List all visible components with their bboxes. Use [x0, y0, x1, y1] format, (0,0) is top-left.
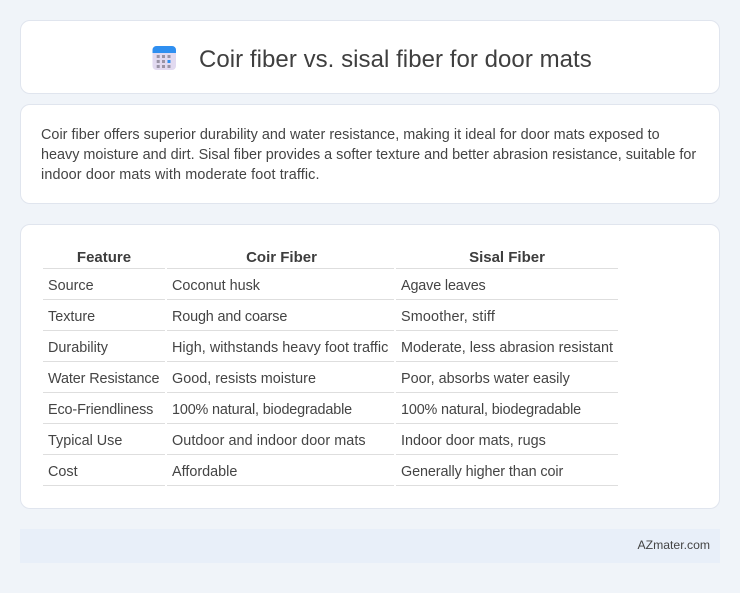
row: water resistance	[48, 371, 570, 387]
table header: Coir Fiber	[246, 249, 317, 266]
row: typical use: Outdoor and indoor door mats	[172, 433, 366, 449]
row: durability: Moderate, less abrasion resistant	[401, 340, 613, 356]
summary paragraph: Coir fiber offers superior durability and water resistance, making it ideal for door mats exposed to	[41, 127, 660, 143]
row: typical use	[48, 433, 546, 449]
panel: summary text	[20, 104, 720, 204]
table header: Feature	[77, 249, 131, 266]
row: eco-friendliness: 100% natural, biodegradable	[172, 402, 352, 418]
row: durability: Durability	[48, 340, 108, 356]
row: water resistance: Good, resists moisture	[172, 371, 316, 387]
summary paragraph: heavy moisture and dirt. Sisal fiber provides a softer texture and better abrasion resistance, suitable for	[41, 147, 696, 163]
row: typical use: Indoor door mats, rugs	[401, 433, 546, 449]
row: source	[48, 278, 486, 294]
row: source: Coconut husk	[172, 278, 260, 294]
summary paragraph: indoor door mats with moderate foot traffic.	[41, 167, 320, 183]
row: texture	[48, 309, 495, 325]
row: eco-friendliness	[48, 402, 581, 418]
footer bar	[20, 529, 720, 563]
panel: title card	[20, 20, 720, 94]
table rules	[43, 268, 618, 486]
row: source: Source	[48, 278, 94, 294]
table header	[77, 249, 545, 266]
row: texture: Texture	[48, 309, 95, 325]
row: durability: High, withstands heavy foot traffic	[172, 340, 388, 356]
row: cost: Generally higher than coir	[401, 464, 563, 480]
row: eco-friendliness: 100% natural, biodegradable	[401, 402, 581, 418]
summary paragraph	[41, 127, 696, 183]
row: water resistance: Water Resistance	[48, 371, 159, 387]
panel: comparison table	[20, 224, 720, 509]
icon: calendar	[152, 46, 176, 70]
row: texture: Smoother, stiff	[401, 309, 495, 325]
footer source text: AZmater.com	[638, 538, 710, 552]
row: cost: Cost	[48, 464, 78, 480]
row: cost	[48, 464, 564, 480]
row: cost: Affordable	[172, 464, 237, 480]
table header: Sisal Fiber	[469, 249, 545, 266]
row: source: Agave leaves	[401, 278, 486, 294]
row: water resistance: Poor, absorbs water easily	[401, 371, 570, 387]
title: Coir fiber vs. sisal fiber for door mats	[199, 46, 592, 73]
row: texture: Rough and coarse	[172, 309, 287, 325]
row: typical use: Typical Use	[48, 433, 122, 449]
row: durability	[48, 340, 613, 356]
row: eco-friendliness: Eco-Friendliness	[48, 402, 153, 418]
